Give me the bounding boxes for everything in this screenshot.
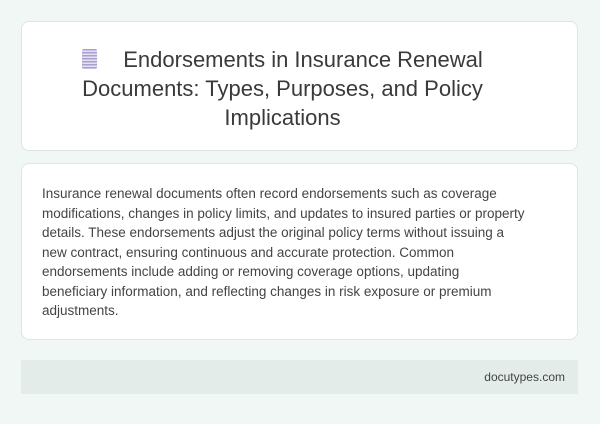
- footer: docutypes.com: [484, 370, 565, 384]
- text block: endorsements include adding or removing coverage options, updating: [42, 264, 459, 279]
- panel: title: [21, 21, 578, 151]
- title: Documents: Types, Purposes, and Policy: [82, 76, 483, 101]
- title: [82, 47, 483, 130]
- text block: modifications, changes in policy limits, and updates to insured parties or property: [42, 206, 524, 220]
- text block: adjustments.: [42, 303, 119, 318]
- text block: beneficiary information, and reflecting changes in risk exposure or premium: [42, 284, 491, 298]
- text block: details. These endorsements adjust the original policy terms without issuing a: [42, 225, 504, 240]
- title: Endorsements in Insurance Renewal: [123, 47, 483, 72]
- text block: new contract, ensuring continuous and accurate protection. Common: [42, 244, 454, 260]
- text block: Insurance renewal documents often record endorsements such as coverage: [42, 186, 497, 201]
- panel: description: [21, 163, 578, 340]
- text block: [42, 186, 524, 318]
- footer: [21, 360, 578, 394]
- title: Implications: [224, 105, 341, 130]
